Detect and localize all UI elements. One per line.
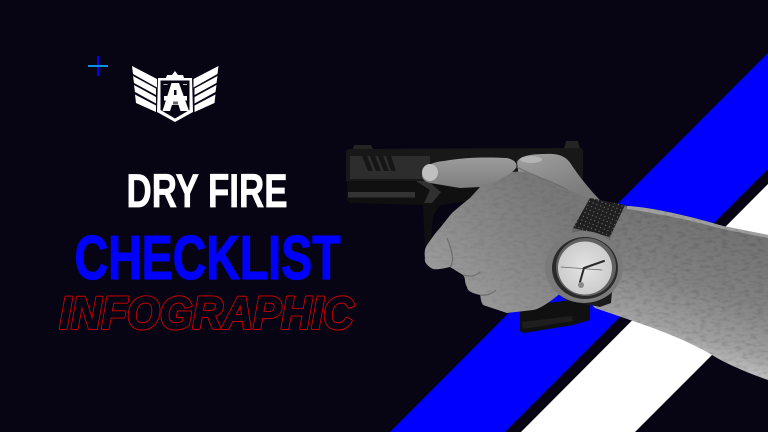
watch dial (558, 242, 612, 294)
second fingernail (520, 156, 542, 163)
knuckle creases (447, 167, 568, 295)
pistol sights (353, 141, 580, 149)
shield (157, 71, 193, 122)
diagonal white band (521, 184, 768, 432)
pistol slide (346, 148, 583, 182)
watch strap lower (560, 292, 612, 307)
pistol (346, 141, 590, 333)
fingernail (422, 164, 438, 181)
title: checklist: CHECKLIST (74, 224, 341, 293)
right wing (194, 66, 218, 112)
forearm (560, 200, 768, 380)
diagonal blue band (390, 53, 768, 432)
watch hands (561, 261, 604, 282)
second finger (517, 154, 600, 225)
pistol frame (347, 181, 490, 246)
index finger (422, 157, 517, 188)
watch strap upper (573, 198, 625, 237)
pistol serrations (362, 156, 396, 171)
title: infographic: INFOGRAPHIC (60, 288, 355, 338)
hand gripping pistol (422, 154, 600, 313)
left wing (132, 66, 157, 112)
title: infographic: INFOGRAPHIC (60, 288, 355, 338)
icon: plus mark (88, 56, 108, 76)
watch bezel (545, 231, 623, 303)
logo: winged shield (132, 66, 218, 122)
title: dry fire: DRY FIRE (126, 164, 288, 217)
watch lug (570, 228, 612, 248)
pistol magazine (520, 298, 590, 333)
wristwatch (545, 198, 625, 307)
back of hand (425, 172, 600, 313)
